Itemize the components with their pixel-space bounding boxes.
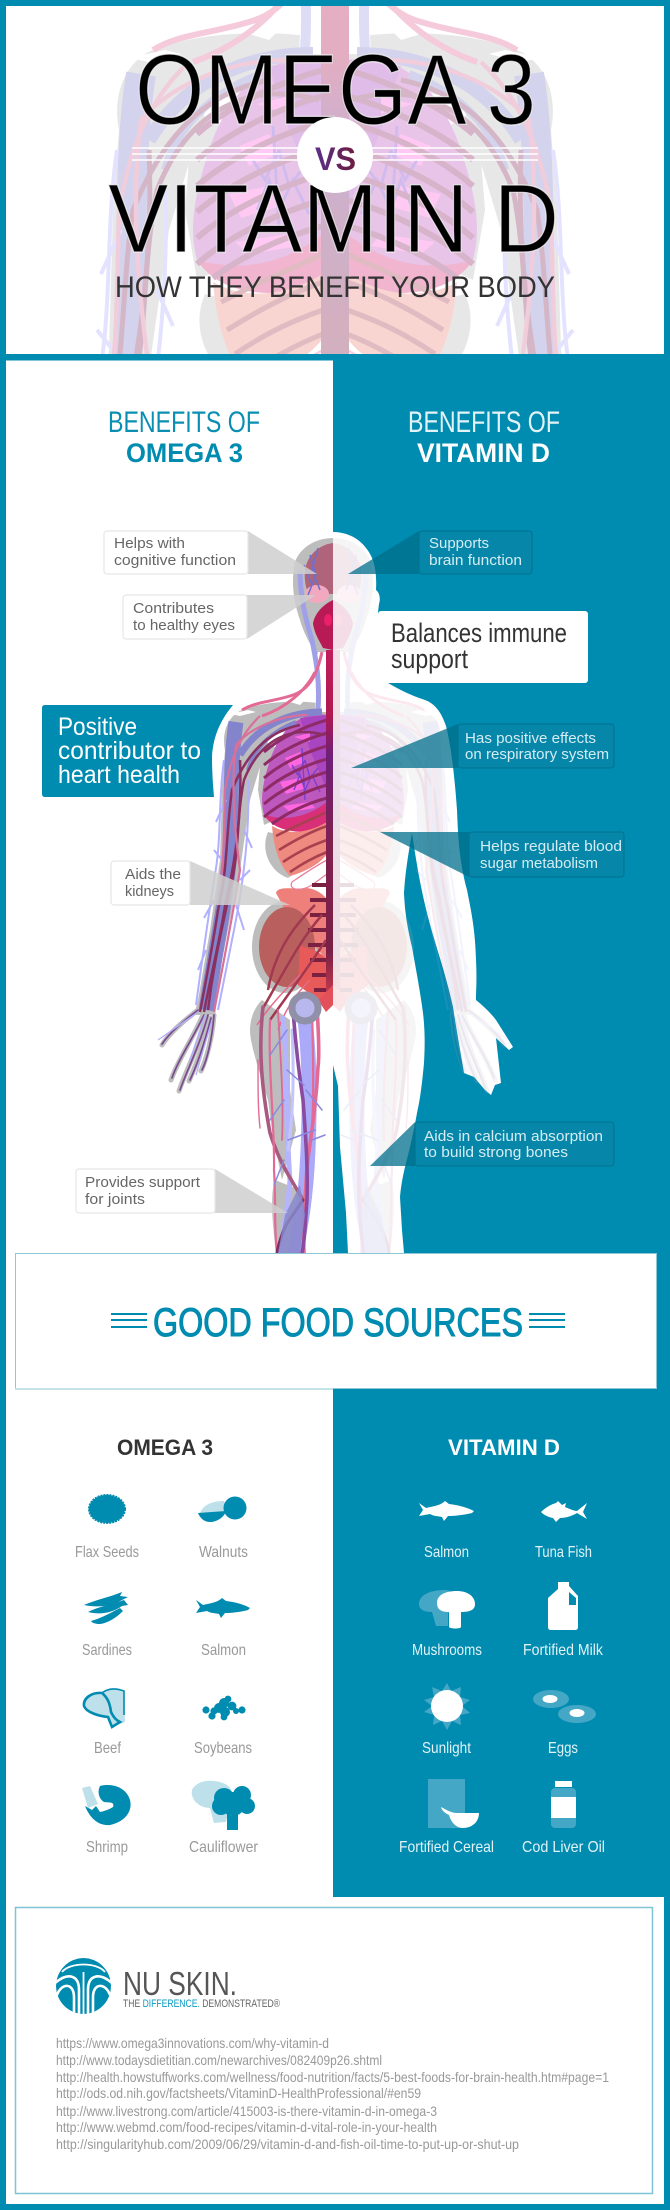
heading: benefits of vitamin d (408, 406, 560, 468)
label: sardines: Sardines (82, 1642, 132, 1659)
label: sunlight: Sunlight (422, 1740, 471, 1757)
callout: cognitive function: Helps with (114, 535, 185, 552)
logo tagline: THE DIFFERENCE. DEMONSTRATED® (123, 1998, 280, 2010)
icon: mushrooms (419, 1590, 475, 1628)
icon: cod liver oil (551, 1781, 576, 1828)
callout: healthy eyes: Contributes (133, 600, 214, 617)
label: flax seeds: Flax Seeds (75, 1544, 139, 1561)
heading panel: good food sources (15, 1254, 656, 1390)
label: eggs: Eggs (548, 1740, 578, 1757)
positive callout box (42, 705, 233, 797)
icon: sunlight (424, 1683, 470, 1730)
callout: cognitive function: cognitive function (114, 552, 236, 569)
source links: http://www.todaysdietitian.com/newarchives/082409p26.shtml (56, 2052, 382, 2068)
icon: shrimp (82, 1785, 131, 1825)
body silhouette: right half (333, 532, 513, 1253)
heading: vitamin d foods: VITAMIN D (448, 1435, 560, 1460)
anatomy: colored left half (158, 538, 333, 1253)
label: mushrooms: Mushrooms (412, 1642, 482, 1659)
icon: sardines (84, 1592, 128, 1624)
anatomy: pale right half (333, 538, 508, 1253)
callout: brain function: brain function (429, 552, 522, 569)
source links (56, 2035, 609, 2152)
label: beef: Beef (94, 1740, 121, 1757)
title: vitamin d: VITAMIN D (108, 164, 559, 273)
heading: benefits of vitamin d: BENEFITS OF (408, 406, 560, 439)
callout: kidneys: kidneys (125, 883, 174, 900)
callout: blood sugar: Helps regulate blood (480, 838, 622, 855)
label: shrimp: Shrimp (86, 1839, 128, 1856)
callout: joints (76, 1169, 288, 1213)
heading: omega 3 foods: OMEGA 3 (117, 1435, 213, 1460)
callout: brain function: Supports (429, 535, 489, 552)
heading: benefits of omega 3 (108, 406, 260, 468)
icon: beef (84, 1689, 125, 1727)
icon: walnuts (198, 1496, 246, 1522)
callout: immune support: Balances immune (391, 618, 567, 648)
triple rule (132, 148, 538, 160)
icon: cauliflower (192, 1781, 255, 1830)
heading: benefits of omega 3: BENEFITS OF (108, 406, 260, 439)
icon: tuna (541, 1501, 587, 1522)
callout: immune support: support (391, 644, 468, 674)
label: salmon white: Salmon (424, 1544, 469, 1561)
callout: respiratory (351, 724, 614, 768)
callout: blood sugar: sugar metabolism (480, 855, 598, 872)
vs badge: VS (315, 141, 356, 177)
callout: respiratory: on respiratory system (465, 746, 609, 763)
faded anatomy backdrop (96, 6, 574, 354)
callout: healthy eyes: to healthy eyes (133, 617, 235, 634)
callout: blood sugar (380, 832, 624, 877)
callout: calcium: to build strong bones (424, 1144, 568, 1161)
source links: http://ods.od.nih.gov/factsheets/VitaminD-HealthProfessional/#en59 (56, 2085, 421, 2101)
positive callout box: contributor to (58, 737, 201, 765)
source links: http://www.webmd.com/food-recipes/vitamin-d-vital-role-in-your-health (56, 2119, 437, 2135)
label: soybeans: Soybeans (194, 1740, 252, 1757)
vs badge (297, 117, 373, 193)
callout: brain function (348, 531, 532, 574)
title: omega 3: OMEGA 3 (135, 34, 536, 146)
callout: healthy eyes (123, 595, 316, 639)
callout: calcium: Aids in calcium absorption (424, 1128, 603, 1145)
header panel (6, 6, 664, 354)
food column: vitamin d (399, 1435, 605, 1856)
callout: kidneys: Aids the (125, 866, 181, 883)
callout: immune support (378, 611, 588, 683)
heading: benefits of omega 3: OMEGA 3 (126, 438, 243, 468)
callout: cognitive function (104, 531, 317, 574)
callout: respiratory: Has positive effects (465, 730, 596, 747)
callout: calcium (370, 1122, 614, 1166)
label: cod liver oil: Cod Liver Oil (522, 1839, 605, 1856)
callout: joints: Provides support (85, 1174, 201, 1191)
logo mark (55, 1958, 112, 2016)
icon: flax seeds (89, 1495, 125, 1523)
callout: joints: for joints (85, 1191, 145, 1208)
label: tuna fish: Tuna Fish (535, 1544, 592, 1561)
source links: https://www.omega3innovations.com/why-vitamin-d (56, 2035, 329, 2051)
icon: fortified cereal (428, 1779, 479, 1828)
positive callout box: Positive (58, 713, 137, 741)
callout: kidneys (111, 861, 290, 905)
icon: salmon (196, 1598, 250, 1618)
icon: soybeans (202, 1696, 246, 1720)
label: fortified cereal: Fortified Cereal (399, 1839, 494, 1856)
heading: benefits of vitamin d: VITAMIN D (417, 438, 550, 468)
label: cauliflower: Cauliflower (189, 1839, 259, 1856)
source links: http://www.livestrong.com/article/415003-is-there-vitamin-d-in-omega-3 (56, 2103, 437, 2119)
source links: http://singularityhub.com/2009/06/29/vitamin-d-and-fish-oil-time-to-put-up-or-shut-up (56, 2136, 519, 2152)
icon: salmon white (419, 1501, 474, 1521)
logo wordmark: NU SKIN. (123, 1965, 237, 2002)
food column: omega 3 (75, 1435, 259, 1856)
subtitle: HOW THEY BENEFIT YOUR BODY (115, 271, 555, 304)
positive callout box: heart health (58, 761, 180, 789)
heading panel: good food sources: GOOD FOOD SOURCES (153, 1301, 523, 1345)
sources panel (16, 1908, 652, 2194)
icon: fortified milk (548, 1582, 578, 1630)
label: salmon: Salmon (201, 1642, 246, 1659)
panel: vitamin d side (333, 360, 664, 1897)
icon: eggs (533, 1690, 596, 1723)
label: walnuts: Walnuts (199, 1544, 248, 1561)
label: fortified milk: Fortified Milk (523, 1642, 604, 1659)
